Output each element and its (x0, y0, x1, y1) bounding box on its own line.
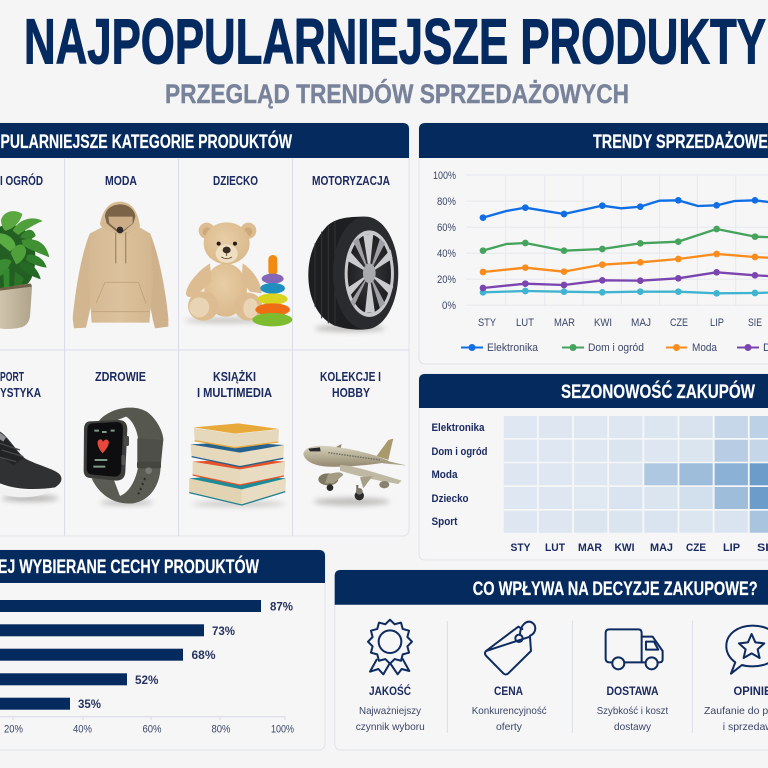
factor: price: Konkurencyjność (472, 705, 547, 717)
line chart (433, 170, 768, 329)
chart legend: Moda (692, 342, 718, 354)
subtitle: PRZEGLĄD TRENDÓW SPRZEDAŻOWYCH (165, 78, 629, 109)
line chart: KWI (594, 317, 612, 329)
category: zdrowie (84, 370, 163, 505)
heatmap: Dziecko (432, 493, 469, 505)
line chart: 0% (442, 300, 456, 312)
line chart: 40% (437, 248, 456, 260)
icon: speech bubble with star (726, 626, 768, 674)
category: sport i turystyka (0, 370, 61, 502)
category: zdrowie: ZDROWIE (95, 370, 146, 384)
heatmap: Dom i ogród (432, 446, 488, 458)
bar chart: 60% (142, 724, 162, 736)
factor: price: oferty (496, 721, 523, 733)
panel: seasonality (419, 374, 768, 560)
bar chart: 87% (270, 600, 293, 614)
factor: reviews (704, 626, 768, 733)
heatmap: MAR (578, 542, 602, 554)
chart legend: Dom i ogród (588, 342, 644, 354)
category: dom i ogród: I OGRÓD (0, 173, 43, 188)
line chart: MAR (554, 317, 575, 329)
category: kolekcje i hobby: KOLEKCJE I (320, 370, 381, 384)
chart legend: Elektronika (487, 342, 539, 354)
line chart: CZE (670, 317, 688, 329)
bar chart: 35% (78, 697, 101, 711)
bar chart: 20% (4, 724, 23, 736)
category: motoryzacja (308, 174, 398, 332)
line chart: STY (478, 317, 497, 329)
factor: delivery (597, 629, 668, 733)
line chart: LUT (516, 317, 534, 329)
category: sport i turystyka: PORT (0, 370, 24, 384)
line chart: 60% (437, 222, 456, 234)
category: sport i turystyka: YSTYKA (0, 386, 41, 400)
factor: quality: JAKOŚĆ (369, 683, 411, 698)
bar chart: 52% (135, 673, 159, 687)
factor: delivery: dostawy (614, 721, 652, 733)
line chart: MAJ (631, 317, 651, 329)
heatmap (432, 416, 768, 554)
category: dziecko: DZIECKO (213, 174, 258, 188)
factor: price (472, 622, 547, 733)
factor: price: CENA (494, 684, 523, 698)
panel: categories (0, 123, 409, 536)
factor: quality: czynnik wyboru (356, 721, 425, 733)
panel: sales trends (419, 123, 768, 364)
heatmap: KWI (614, 542, 634, 554)
heatmap: CZE (686, 542, 706, 554)
icon: truck (606, 629, 663, 669)
line chart: 100% (433, 170, 456, 182)
factor: delivery: DOSTAWA (606, 684, 659, 698)
bar chart: 100% (271, 724, 294, 736)
category: książki i multimedia: I MULTIMEDIA (197, 386, 272, 400)
bar chart (0, 600, 294, 736)
category: książki i multimedia (189, 369, 286, 507)
category: książki i multimedia: KSIĄŻKI (213, 369, 256, 384)
bar chart: 73% (212, 624, 235, 638)
bar chart: 68% (192, 648, 216, 662)
bar chart: 40% (73, 724, 92, 736)
line chart: SIE (748, 317, 762, 329)
heatmap: Elektronika (432, 422, 485, 434)
panel: purchase decisions (335, 570, 768, 750)
icon: price tag (485, 622, 535, 674)
heatmap: Sport (432, 516, 458, 528)
line chart: 20% (437, 274, 456, 286)
heatmap: STY (510, 542, 531, 554)
category: dziecko (185, 174, 292, 326)
line chart: 80% (437, 196, 456, 208)
heatmap: MAJ (650, 542, 673, 554)
heatmap: LIP (723, 542, 740, 554)
category: motoryzacja: MOTORYZACJA (312, 174, 390, 188)
icon: medal (368, 620, 412, 674)
factor: delivery: Szybkość i koszt (597, 705, 668, 717)
factor: quality (356, 620, 425, 733)
category: dom i ogród (0, 173, 49, 329)
factor: quality: Najważniejszy (359, 705, 422, 717)
chart legend (461, 342, 768, 354)
category: moda (73, 174, 168, 328)
panel: product features (0, 550, 325, 750)
heatmap: LUT (545, 542, 565, 554)
line chart: LIP (710, 317, 724, 329)
heatmap: Moda (432, 469, 458, 481)
category: moda: MODA (105, 174, 137, 188)
bar chart: 80% (212, 724, 231, 736)
category: kolekcje i hobby (303, 370, 406, 506)
category: kolekcje i hobby: HOBBY (332, 386, 371, 400)
